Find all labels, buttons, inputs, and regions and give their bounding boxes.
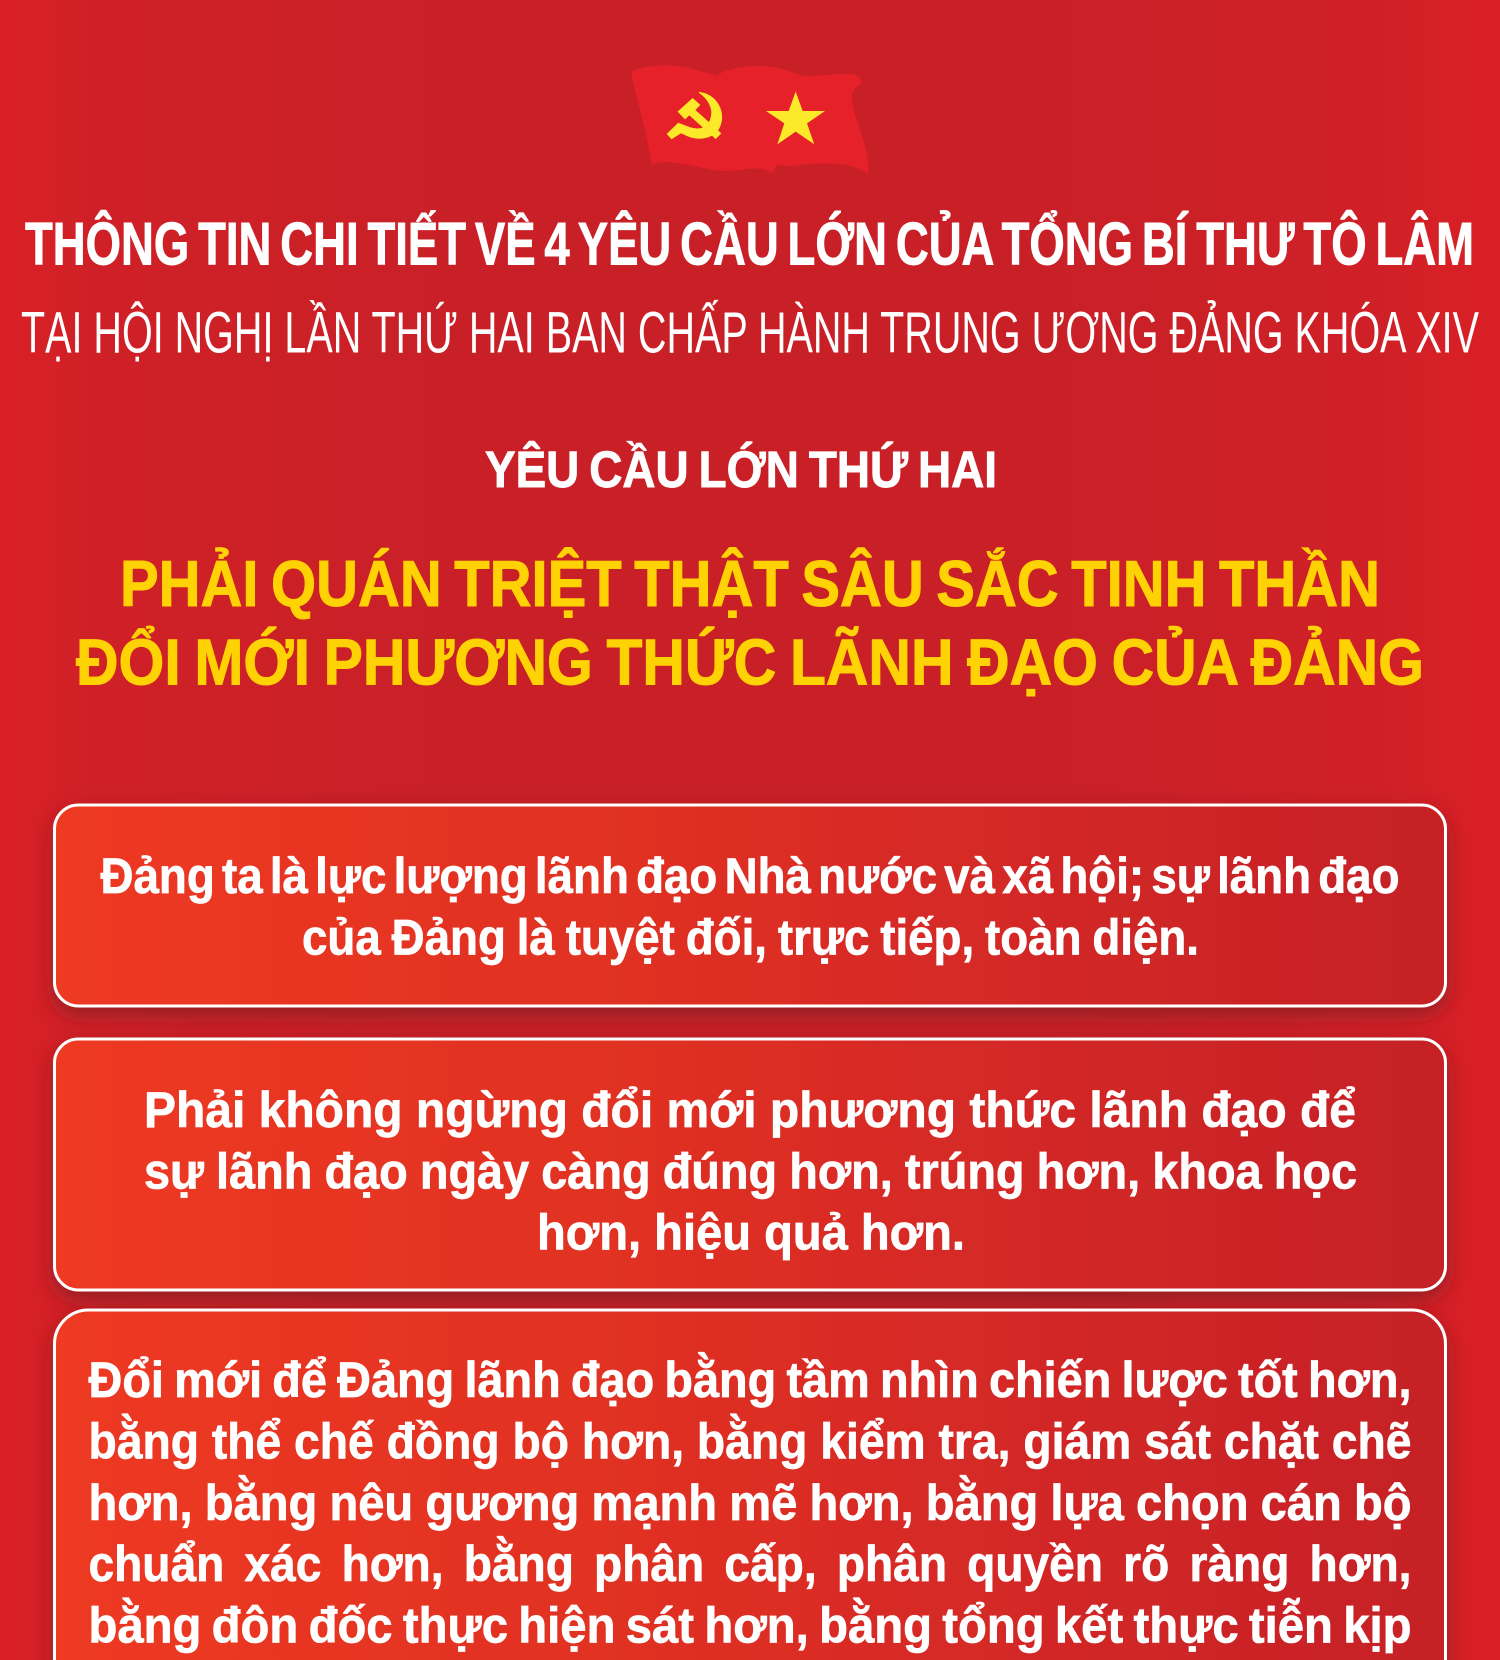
panel: statement 3: chuẩn xác hơn, bằng phân cấp, phân quyền rõ ràng hơn, bbox=[88, 1536, 1412, 1592]
panel: statement 3: Đổi mới để Đảng lãnh đạo bằng tầm nhìn chiến lược tốt hơn, bbox=[88, 1352, 1412, 1408]
panel: statement 3: hơn, bằng nêu gương mạnh mẽ hơn, bằng lựa chọn cán bộ bbox=[88, 1475, 1412, 1531]
panel: statement 2: sự lãnh đạo ngày càng đúng hơn, trúng hơn, khoa học bbox=[144, 1144, 1357, 1200]
icon: party flag with hammer, sickle and star bbox=[631, 65, 868, 174]
panel: statement 3 bbox=[54, 1310, 1446, 1660]
panel: statement 2: Phải không ngừng đổi mới phương thức lãnh đạo để bbox=[144, 1082, 1356, 1138]
yellow heading: PHẢI QUÁN TRIỆT THẬT SÂU SẮC TINH THẦN bbox=[120, 547, 1380, 620]
panel: statement 1: của Đảng là tuyệt đối, trực tiếp, toàn diện. bbox=[302, 910, 1199, 966]
panel: statement 2: hơn, hiệu quả hơn. bbox=[537, 1204, 965, 1260]
panel: statement 3: bằng thể chế đồng bộ hơn, bằng kiểm tra, giám sát chặt chẽ bbox=[88, 1414, 1412, 1470]
panel: statement 1: Đảng ta là lực lượng lãnh đạo Nhà nước và xã hội; sự lãnh đạo bbox=[100, 848, 1400, 904]
panel: statement 2 bbox=[54, 1039, 1446, 1290]
yellow heading bbox=[76, 547, 1424, 698]
panel: statement 1 bbox=[54, 805, 1446, 1006]
section label: YÊU CẦU LỚN THỨ HAI bbox=[485, 440, 997, 498]
panel: statement 3: bằng đôn đốc thực hiện sát hơn, bằng tổng kết thực tiễn kịp bbox=[88, 1598, 1412, 1654]
